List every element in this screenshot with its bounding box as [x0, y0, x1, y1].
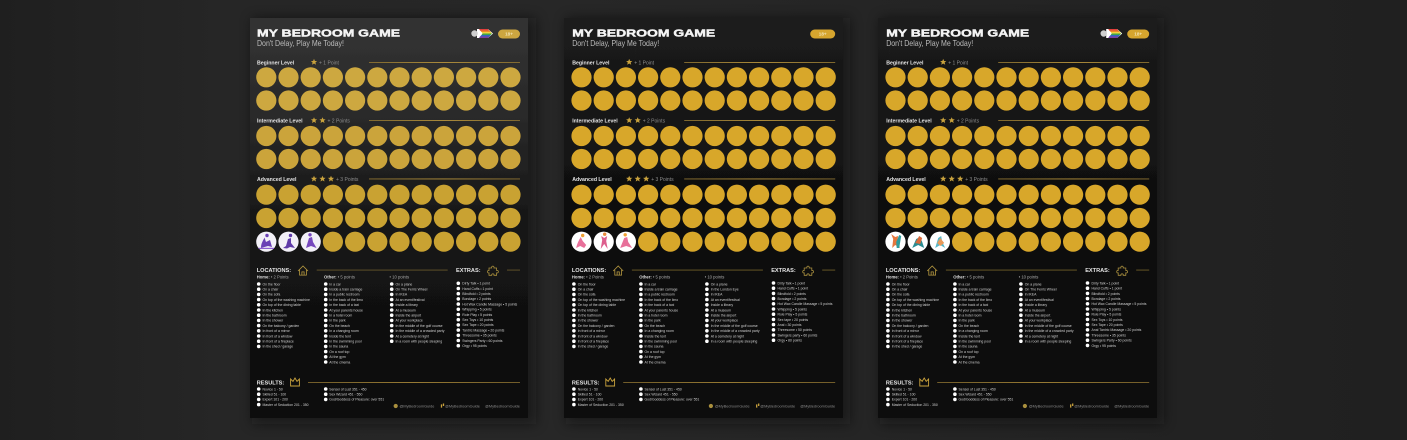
- poster 3 icon: pride flag: [1100, 29, 1122, 38]
- poster 2 social handles: @MyBedroomGuide: [715, 404, 750, 408]
- poster 1 extras: Whipping • 5 points: [462, 308, 492, 312]
- poster 2 locations header: [572, 266, 763, 275]
- poster 2 column: home: In the bathroom: [578, 314, 602, 318]
- poster 3 column: 10 points: On a plane: [1025, 282, 1042, 286]
- poster 3 results: [886, 378, 1149, 407]
- poster 1 column: 10 points: At your workplace: [396, 319, 423, 323]
- poster 2 column: home: In the kitchen: [578, 308, 598, 312]
- poster 2 advanced level header: [572, 176, 835, 183]
- poster 1 column: home: On a chair: [262, 288, 279, 292]
- poster 1 extras: Threesome • 35 points: [462, 334, 497, 338]
- poster 2 column: 10 points: In IKEA: [711, 293, 723, 297]
- poster 2 beginner circles: [571, 67, 836, 111]
- poster 2 extras: [771, 266, 835, 343]
- poster 3 column: 10 points: Inside the airport: [1025, 314, 1050, 318]
- poster 3 column: home: In the bathroom: [892, 314, 916, 318]
- poster 1 column: home: On the sofa: [262, 293, 280, 297]
- poster 2 column: other 5 points: At the cinema: [644, 360, 666, 364]
- poster 2 results: [572, 378, 835, 407]
- poster 2 social handles: [709, 404, 835, 408]
- poster 3 position illustrations: [885, 232, 950, 252]
- poster 3 column: home: On the sofa: [892, 293, 910, 297]
- poster 2 extras: Swingers party • 60 points: [778, 333, 818, 337]
- poster 1 locations header: LOCATIONS:: [257, 268, 291, 274]
- poster 1 results: Sensei of Lust 351 - 450: [329, 387, 367, 391]
- poster 3 column: 10 points: In IKEA: [1025, 293, 1037, 297]
- poster 2 beginner level header: + 1 Point: [634, 60, 655, 66]
- poster 1 extras: Sex Toys • 10 points: [462, 318, 494, 322]
- poster 1 intermediate circles: [256, 126, 521, 169]
- poster 1 column: other 5 points: In the back of a taxi: [329, 303, 359, 307]
- poster 2 extras: Blindfold • 2 points: [778, 292, 806, 296]
- poster 2 results: Sensei of Lust 351 - 450: [644, 387, 682, 391]
- poster 3 column: other 5 points: In the sauna: [958, 345, 978, 349]
- poster 3 results: Expert 101 - 200: [892, 398, 917, 402]
- poster 3 extras: Sex Tape • 20 points: [1092, 323, 1123, 327]
- poster 2 column: other 5 points: In a public restroom: [644, 293, 675, 297]
- poster 1 results: Skilled 51 - 100: [262, 392, 286, 396]
- poster 1 extras: Hot Wax Candle Massage • 5 points: [462, 302, 518, 306]
- poster 2 column: home: In the shed / garage: [578, 345, 608, 349]
- poster 2 column: home: In front of a mirror: [578, 329, 606, 333]
- poster 2 column: home: In the shower: [578, 319, 599, 323]
- poster 1 column: other 5 points: In the sauna: [329, 345, 348, 349]
- poster 1 column: 10 points: At an event/festival: [396, 298, 425, 302]
- poster 3 results: Sex Wizard 451 - 550: [958, 392, 992, 396]
- poster 2 extras: Hand Cuffs • 1 point: [778, 287, 808, 291]
- poster 1 locations header: [257, 266, 448, 275]
- poster 1 column: home: In the bathroom: [262, 314, 287, 318]
- poster 3 results: Sensei of Lust 351 - 450: [958, 387, 996, 391]
- poster 1 column: home: In front of a window: [262, 334, 293, 338]
- poster 3 intermediate level header: Intermediate Level: [886, 118, 932, 124]
- poster 1 results: [257, 378, 520, 407]
- poster 2 social handles: @MyBedroomGuide: [800, 404, 835, 408]
- poster 2 extras: Anal • 30 points: [778, 323, 802, 327]
- poster 3 column: other 5 points: At the gym: [958, 355, 975, 359]
- poster 1 column: 10 points: [390, 274, 445, 344]
- poster 2 column: home: Home: • 2 Points: [572, 274, 604, 279]
- poster 3 beginner level header: Beginner Level: [886, 60, 924, 66]
- poster 3 extras: Anal Tantric Massage • 20 points: [1092, 328, 1142, 332]
- poster 2 column: 10 points: In a room with people sleeping: [711, 340, 757, 344]
- poster 2 column: other 5 points: In a car: [644, 282, 657, 286]
- poster 2 column: other 5 points: In the swimming pool: [644, 340, 677, 344]
- poster 1 column: other 5 points: Inside the tent: [329, 334, 351, 338]
- poster 1 extras: [456, 266, 520, 348]
- poster 3 beginner level header: + 1 Point: [948, 60, 969, 66]
- poster 2 column: 10 points: Inside the airport: [711, 314, 736, 318]
- poster 1 intermediate level header: [257, 117, 520, 124]
- poster 1 column: home: In front of a mirror: [262, 329, 291, 333]
- poster 3 column: home: On the balcony / garden: [892, 324, 928, 328]
- poster 3 subtitle: Don't Delay, Play Me Today!: [886, 38, 973, 48]
- poster 2 extras: Bondage • 2 points: [778, 297, 807, 301]
- poster 2 column: 10 points: At a cemetery at night: [711, 334, 744, 338]
- poster 2 results: RESULTS:: [572, 380, 600, 386]
- poster 3 column: other 5 points: In the swimming pool: [958, 340, 991, 344]
- poster 2 extras: Hot Wax Candle Massage • 5 points: [778, 302, 833, 306]
- poster 3 column: home: In front of a mirror: [892, 329, 920, 333]
- poster 2 extras: EXTRAS:: [771, 268, 796, 274]
- poster 1 column: 10 points: • 10 points: [390, 274, 409, 279]
- poster 1 column: 10 points: Inside a library: [396, 303, 418, 307]
- poster 2 column: home: On top of the dining table: [578, 303, 616, 307]
- poster 3 column: home: On a chair: [892, 288, 908, 292]
- poster 2 social handles: @MyBedroomGuide: [760, 404, 795, 408]
- poster 3 extras: Bondage • 2 points: [1092, 297, 1121, 301]
- poster 1 results: Expert 101 - 200: [262, 398, 288, 402]
- poster 2 column: 10 points: In the middle of a crowded party: [711, 329, 760, 333]
- poster 3 column: 10 points: At your workplace: [1025, 319, 1052, 323]
- poster 2 column: other 5 points: On the beach: [644, 324, 665, 328]
- poster 2 title: MY BEDROOM GAME: [572, 28, 715, 39]
- poster 2 column: home: [572, 274, 625, 350]
- poster 3 column: 10 points: At a cemetery at night: [1025, 334, 1058, 338]
- poster 2 column: other 5 points: In the back of the limo: [644, 298, 678, 302]
- poster 3 column: 10 points: At an event/festival: [1025, 298, 1054, 302]
- poster 1 social handles: @MyBedroomGuide: [485, 404, 520, 408]
- poster 2 advanced level header: Advanced Level: [572, 177, 612, 183]
- poster 2 column: other 5 points: Other: • 5 points: [639, 274, 670, 279]
- poster 2: [564, 18, 843, 418]
- poster 2 results: Expert 101 - 200: [578, 398, 603, 402]
- poster 2 column: other 5 points: At your parents house: [644, 308, 678, 312]
- poster 1 column: home: On the floor: [262, 282, 281, 286]
- poster 2 column: other 5 points: In the back of a taxi: [644, 303, 675, 307]
- poster 3 age badge: 18+: [1134, 32, 1142, 37]
- poster 2 results: Novice 1 - 50: [578, 387, 598, 391]
- poster 1 column: home: Home: • 2 Points: [257, 274, 289, 279]
- poster 3 title: MY BEDROOM GAME: [886, 28, 1029, 39]
- poster 3 social handles: @MyBedroomGuide: [1114, 404, 1149, 408]
- poster 3 column: 10 points: In a room with people sleeping: [1025, 340, 1071, 344]
- poster 3 column: other 5 points: [953, 274, 992, 364]
- poster 3 column: other 5 points: On the beach: [958, 324, 979, 328]
- poster 3 column: 10 points: • 10 points: [1019, 274, 1038, 279]
- poster 2 column: other 5 points: Inside the tent: [644, 334, 666, 338]
- poster 1 column: other 5 points: On the beach: [329, 324, 350, 328]
- poster 3 column: 10 points: At a museum: [1025, 308, 1045, 312]
- poster 2 column: home: On a chair: [578, 288, 594, 292]
- poster 2 subtitle: Don't Delay, Play Me Today!: [572, 38, 659, 48]
- poster 3 age badge: [1127, 30, 1149, 38]
- poster 1 column: other 5 points: In the back of the limo: [329, 298, 363, 302]
- poster 1 advanced circles: [256, 185, 521, 252]
- poster 1 column: other 5 points: In a public restroom: [329, 293, 360, 297]
- poster 1 column: home: In the shower: [262, 319, 284, 323]
- poster 3 column: home: In the kitchen: [892, 308, 912, 312]
- poster 1 column: home: [257, 274, 310, 350]
- poster 2 column: other 5 points: In a hotel room: [644, 314, 668, 318]
- poster 2 column: 10 points: [705, 274, 760, 344]
- poster 1 column: other 5 points: In a hotel room: [329, 314, 352, 318]
- poster 1 advanced level header: + 3 Points: [336, 177, 359, 183]
- poster 1 beginner circles: [256, 67, 521, 111]
- poster 1 column: 10 points: At a museum: [396, 308, 416, 312]
- poster 2 column: other 5 points: At the gym: [644, 355, 661, 359]
- poster 3 beginner level header: [886, 59, 1149, 66]
- poster 2 column: other 5 points: On a roof top: [644, 350, 665, 354]
- poster 3 column: other 5 points: In the back of a taxi: [958, 303, 989, 307]
- poster 1 results: Master of Seduction 201 - 350: [262, 403, 309, 407]
- poster 3 social handles: @MyBedroomGuide: [1029, 404, 1064, 408]
- poster 2 position illustrations: [571, 232, 636, 252]
- poster 1 social handles: @MyBedroomGuide: [400, 404, 434, 408]
- poster 3 extras: Sex Toys • 10 points: [1092, 318, 1123, 322]
- poster 1 column: other 5 points: In a changing room: [329, 329, 359, 333]
- poster 3 column: other 5 points: In the back of the limo: [958, 298, 992, 302]
- poster 3 column: 10 points: Inside a library: [1025, 303, 1047, 307]
- poster 2 column: 10 points: At your workplace: [711, 319, 738, 323]
- poster 3 beginner circles: [885, 67, 1150, 111]
- poster 1 column: 10 points: In a room with people sleeping: [396, 340, 442, 344]
- poster 1 extras: Bondage • 2 points: [462, 297, 491, 301]
- poster 3 column: other 5 points: Inside the tent: [958, 334, 980, 338]
- poster 3 extras: Hot Wax Candle Massage • 5 points: [1092, 302, 1147, 306]
- poster 3 intermediate circles: [885, 126, 1150, 169]
- poster 3 advanced circles: [885, 185, 1150, 252]
- poster 3 social handles: @MyBedroomGuide: [1074, 404, 1109, 408]
- poster 2 intermediate level header: + 2 Points: [643, 118, 666, 124]
- poster 1 column: other 5 points: At the cinema: [329, 360, 350, 364]
- poster 3 advanced level header: Advanced Level: [886, 177, 926, 183]
- poster 1 extras: Dirty Talk • 1 point: [462, 282, 490, 286]
- poster 2 extras: Whipping • 5 points: [778, 307, 807, 311]
- poster 3 results: Skilled 51 - 100: [892, 392, 915, 396]
- poster 1 column: other 5 points: [324, 274, 363, 364]
- poster 2 column: 10 points: At an event/festival: [711, 298, 740, 302]
- poster 2 results: God/Goddess of Pleasure: over 551: [644, 398, 699, 402]
- poster 1 extras: Role Play • 5 points: [462, 313, 492, 317]
- poster 1 column: 10 points: Inside the airport: [396, 314, 421, 318]
- poster 3 extras: Whipping • 5 points: [1092, 307, 1121, 311]
- poster 1 extras: Orgy • 95 points: [462, 344, 487, 348]
- poster 1 column: home: In front of a fireplace: [262, 340, 294, 344]
- poster 1 extras: Sex Tape • 20 points: [462, 323, 494, 327]
- poster 3 column: home: On the floor: [892, 282, 911, 286]
- poster 3 column: 10 points: On The Ferris Wheel: [1025, 288, 1057, 292]
- poster 1 extras: Hand Cuffs • 1 point: [462, 287, 493, 291]
- poster 1 column: other 5 points: On a roof top: [329, 350, 349, 354]
- poster 1 social handles: @MyBedroomGuide: [445, 404, 480, 408]
- poster 2 column: home: On top of the washing machine: [578, 298, 625, 302]
- poster 2 panel: [564, 18, 843, 418]
- poster 3 locations header: LOCATIONS:: [886, 268, 920, 274]
- poster 1 extras: Swingers Party • 60 points: [462, 339, 503, 343]
- poster 3 column: home: In front of a window: [892, 334, 922, 338]
- poster 2 advanced circles: [571, 185, 836, 252]
- poster 1 column: other 5 points: In a car: [329, 282, 342, 286]
- poster 1 intermediate level header: Intermediate Level: [257, 118, 303, 124]
- poster 2 results: Master of Seduction 201 - 350: [578, 403, 624, 407]
- poster 2 column: other 5 points: In a changing room: [644, 329, 674, 333]
- poster 1 column: home: On the balcony / garden: [262, 324, 299, 328]
- poster 1 column: other 5 points: At the gym: [329, 355, 346, 359]
- poster 3 extras: Swingers Party • 60 points: [1092, 339, 1132, 343]
- poster 3 column: home: On top of the dining table: [892, 303, 930, 307]
- poster 1 column: other 5 points: In the park: [329, 319, 346, 323]
- poster 3 intermediate level header: + 2 Points: [957, 118, 980, 124]
- poster 3 column: other 5 points: At your parents house: [958, 308, 992, 312]
- poster 2 advanced level header: + 3 Points: [651, 177, 674, 183]
- poster 3 extras: [1085, 266, 1149, 348]
- poster 3 column: other 5 points: In a changing room: [958, 329, 988, 333]
- poster 2 column: 10 points: In the London Eye: [711, 288, 739, 292]
- poster 1 column: 10 points: In IKEA: [396, 293, 408, 297]
- poster 2 results: Sex Wizard 451 - 550: [644, 392, 678, 396]
- poster 1 position illustrations: [256, 232, 321, 252]
- poster 3 advanced level header: [886, 176, 1149, 183]
- poster 3 column: other 5 points: In a car: [958, 282, 971, 286]
- poster 1 column: 10 points: On The Ferris Wheel: [396, 288, 428, 292]
- poster 3 column: home: Home: • 2 Points: [886, 274, 918, 279]
- poster 3 column: other 5 points: At the cinema: [958, 360, 980, 364]
- poster 1 extras: Blindfold • 2 points: [462, 292, 491, 296]
- poster 3 column: 10 points: In the middle of a crowded party: [1025, 329, 1074, 333]
- poster 1 icon: pride flag: [471, 29, 493, 38]
- poster 3 column: home: [886, 274, 939, 350]
- poster 1: [250, 18, 528, 418]
- poster 3 column: 10 points: [1019, 274, 1074, 344]
- poster 3 column: home: In the shed / garage: [892, 345, 922, 349]
- poster 1 column: other 5 points: Inside a train carriage: [329, 288, 362, 292]
- poster 2 beginner level header: Beginner Level: [572, 60, 610, 66]
- poster 3 extras: Threesome • 35 points: [1092, 333, 1126, 337]
- poster 2 locations header: LOCATIONS:: [572, 268, 606, 274]
- poster 2 beginner level header: [572, 59, 835, 66]
- poster 3 column: other 5 points: In the park: [958, 319, 975, 323]
- poster 1 column: home: On top of the dining table: [262, 303, 301, 307]
- poster 3 column: other 5 points: In a public restroom: [958, 293, 989, 297]
- poster 1 column: home: On top of the washing machine: [262, 298, 310, 302]
- poster 2 column: 10 points: On a plane: [711, 282, 728, 286]
- poster 1 social handles: [394, 404, 520, 408]
- poster 2 results: Skilled 51 - 100: [578, 392, 601, 396]
- poster 3 column: home: In the shower: [892, 319, 913, 323]
- poster 3 extras: EXTRAS:: [1085, 268, 1110, 274]
- poster 3 results: God/Goddess of Pleasure: over 551: [958, 398, 1013, 402]
- poster 1 column: home: In the kitchen: [262, 308, 283, 312]
- poster 1 subtitle: Don't Delay, Play Me Today!: [257, 38, 344, 48]
- poster 1 column: other 5 points: At your parents house: [329, 308, 363, 312]
- poster 1 age badge: 18+: [505, 32, 513, 37]
- poster 2 intermediate circles: [571, 126, 836, 169]
- poster 3 panel: [878, 18, 1157, 418]
- poster 1 column: other 5 points: Other: • 5 points: [324, 274, 355, 279]
- poster 1 extras: Tantric Massage • 20 points: [462, 328, 505, 332]
- poster 2 column: 10 points: Inside a library: [711, 303, 733, 307]
- poster 2 column: 10 points: • 10 points: [705, 274, 724, 279]
- poster 3 extras: Role Play • 5 points: [1092, 313, 1122, 317]
- poster 3 advanced level header: + 3 Points: [965, 177, 988, 183]
- poster 2 age badge: [810, 30, 835, 38]
- shadows under posters: [252, 18, 1164, 424]
- poster 3: [878, 18, 1157, 418]
- poster 1 results: RESULTS:: [257, 380, 284, 386]
- poster 2 column: home: On the sofa: [578, 293, 596, 297]
- poster 3 column: home: In front of a fireplace: [892, 340, 923, 344]
- poster 2 column: other 5 points: Inside a train carriage: [644, 288, 678, 292]
- poster 1 column: 10 points: On a plane: [396, 282, 412, 286]
- poster 1 column: 10 points: In the middle of the golf course: [396, 324, 443, 328]
- poster 2 column: other 5 points: [639, 274, 678, 364]
- poster 1 results: Novice 1 - 50: [262, 387, 283, 391]
- poster 3 results: Master of Seduction 201 - 350: [892, 403, 938, 407]
- poster 3 column: other 5 points: In a hotel room: [958, 314, 982, 318]
- poster 2 column: other 5 points: In the park: [644, 319, 661, 323]
- poster 1 column: 10 points: In the middle of a crowded party: [396, 329, 445, 333]
- poster 2 column: home: On the balcony / garden: [578, 324, 614, 328]
- poster 2 column: 10 points: At a museum: [711, 308, 731, 312]
- poster 3 column: other 5 points: Other: • 5 points: [953, 274, 984, 279]
- poster 1 title: MY BEDROOM GAME: [257, 28, 400, 39]
- poster 2 column: home: In front of a window: [578, 334, 608, 338]
- poster 1 intermediate level header: + 2 Points: [328, 118, 350, 124]
- poster 1 age badge: [498, 30, 520, 38]
- poster 3 extras: Orgy • 95 points: [1092, 344, 1116, 348]
- poster 2 intermediate level header: [572, 117, 835, 124]
- poster 2 extras: Role Play • 5 points: [778, 313, 808, 317]
- poster 2 intermediate level header: Intermediate Level: [572, 118, 618, 124]
- poster 2 column: other 5 points: In the sauna: [644, 345, 664, 349]
- poster 3 social handles: [1023, 404, 1149, 408]
- poster 1 beginner level header: [257, 59, 520, 66]
- poster 1 advanced level header: Advanced Level: [257, 177, 297, 183]
- poster 1 column: other 5 points: In the swimming pool: [329, 340, 362, 344]
- poster 1 results: Sex Wizard 451 - 550: [329, 392, 362, 396]
- poster 1 results: God/Goddess of Pleasure: over 551: [329, 398, 384, 402]
- poster 2 column: 10 points: In the middle of the golf course: [711, 324, 758, 328]
- poster 1 beginner level header: Beginner Level: [257, 60, 295, 66]
- poster 1 extras: EXTRAS:: [456, 268, 481, 274]
- poster 3 column: home: On top of the washing machine: [892, 298, 939, 302]
- poster 3 results: Novice 1 - 50: [892, 387, 912, 391]
- poster 3 column: other 5 points: On a roof top: [958, 350, 979, 354]
- poster 2 column: home: In front of a fireplace: [578, 340, 609, 344]
- poster 2 age badge: 18+: [819, 32, 827, 37]
- poster 1 column: home: In the shed / garage: [262, 345, 293, 349]
- poster 2 extras: Dirty Talk • 1 point: [778, 281, 805, 285]
- poster 3 extras: Blindfold • 2 points: [1092, 292, 1120, 296]
- poster 2 extras: Sex tape • 20 points: [778, 318, 808, 322]
- poster 1 beginner level header: + 1 Point: [319, 60, 339, 66]
- poster 1 column: 10 points: At a cemetery at night: [396, 334, 429, 338]
- poster 3 extras: Hand Cuffs • 1 point: [1092, 287, 1122, 291]
- poster 2 extras: Threesome • 50 points: [778, 328, 812, 332]
- poster 2 extras: Orgy • 80 points: [778, 339, 802, 343]
- poster 3 intermediate level header: [886, 117, 1149, 124]
- poster 3 results: RESULTS:: [886, 380, 914, 386]
- poster 3 column: 10 points: In the middle of the golf course: [1025, 324, 1072, 328]
- poster 3 extras: Dirty Talk • 1 point: [1092, 281, 1119, 285]
- poster 1 advanced level header: [257, 176, 520, 183]
- poster 3 locations header: [886, 266, 1077, 275]
- poster 1 panel: [250, 18, 528, 418]
- poster 3 column: other 5 points: Inside a train carriage: [958, 288, 992, 292]
- poster 2 column: home: On the floor: [578, 282, 597, 286]
